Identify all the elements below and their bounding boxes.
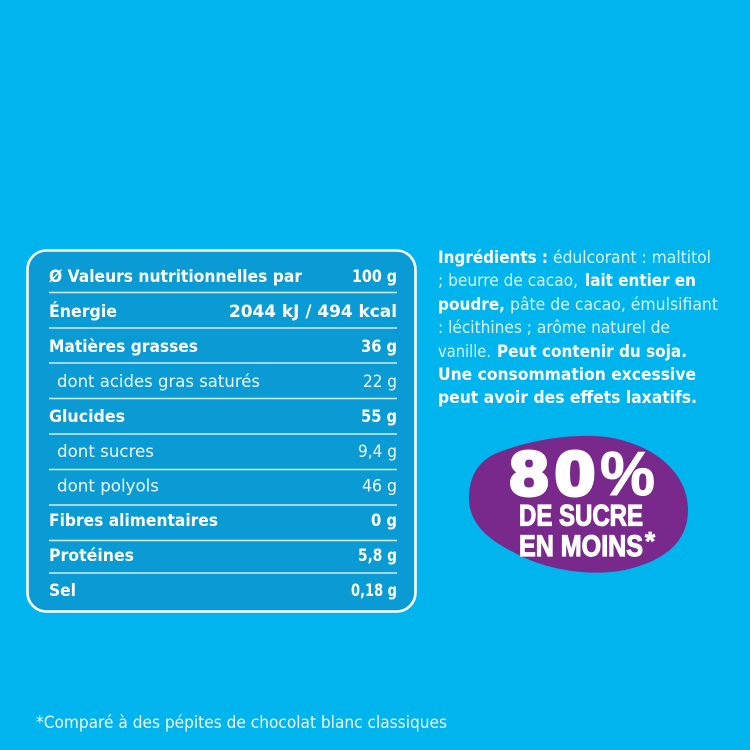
row: sel: Sel bbox=[49, 581, 76, 601]
row: sucres: dont sucres bbox=[57, 442, 154, 462]
row: acides gras saturés bbox=[57, 372, 397, 392]
row: matières grasses bbox=[49, 337, 397, 357]
row: sel: 0,18 g bbox=[351, 581, 397, 601]
text block: ingredients: : lécithines ; arôme naturel de bbox=[438, 318, 670, 338]
text block: ingredients: Peut contenir du soja. bbox=[497, 342, 687, 362]
row: acides gras saturés: dont acides gras saturés bbox=[57, 372, 260, 392]
row: protéines bbox=[49, 546, 397, 566]
footnote: *Comparé à des pépites de chocolat blanc classiques bbox=[36, 713, 447, 733]
badge: 80% de sucre en moins: EN MOINS bbox=[519, 530, 643, 563]
text block: ingredients: vanille. bbox=[438, 342, 491, 362]
text block: ingredients: peut avoir des effets laxatifs. bbox=[438, 388, 697, 408]
badge: 80% de sucre en moins bbox=[469, 436, 688, 573]
row: sucres bbox=[57, 442, 397, 462]
row: fibres alimentaires: 0 g bbox=[371, 511, 397, 531]
table header row: Ø Valeurs nutritionnelles par bbox=[49, 267, 303, 287]
text block: ingredients: édulcorant : maltitol bbox=[553, 248, 711, 268]
text block: ingredients: Une consommation excessive bbox=[438, 365, 696, 385]
text block: ingredients: lait entier en bbox=[585, 271, 696, 291]
text block: ingredients: poudre, bbox=[438, 295, 505, 315]
row: polyols bbox=[57, 476, 397, 496]
badge: 80% de sucre en moins: DE SUCRE bbox=[519, 500, 643, 532]
row: sel bbox=[49, 581, 397, 601]
text block: ingredients: pâte de cacao, émulsifiant bbox=[510, 295, 718, 315]
row: énergie: 2044 kJ / 494 kcal bbox=[229, 302, 397, 322]
badge: 80% de sucre en moins: * bbox=[645, 526, 656, 556]
row: fibres alimentaires: Fibres alimentaires bbox=[49, 511, 218, 531]
row: énergie bbox=[49, 300, 397, 322]
row: fibres alimentaires bbox=[49, 511, 397, 531]
row: glucides bbox=[49, 407, 397, 427]
panel: nutrition table bbox=[28, 250, 416, 612]
row: énergie: Énergie bbox=[49, 300, 117, 322]
text block: ingredients bbox=[438, 248, 718, 408]
row: matières grasses: Matières grasses bbox=[49, 337, 198, 357]
row: glucides: 55 g bbox=[361, 407, 397, 427]
row: sucres: 9,4 g bbox=[358, 442, 397, 462]
badge: 80% de sucre en moins: % bbox=[600, 440, 655, 509]
badge: 80% de sucre en moins: 0 bbox=[555, 440, 595, 509]
text block: ingredients: ; beurre de cacao, bbox=[438, 271, 578, 291]
row: matières grasses: 36 g bbox=[361, 337, 397, 357]
badge: 80% de sucre en moins: 8 bbox=[510, 440, 548, 509]
row: polyols: 46 g bbox=[362, 476, 397, 496]
text block: ingredients: Ingrédients : bbox=[438, 248, 548, 268]
row: acides gras saturés: 22 g bbox=[363, 372, 397, 392]
row: glucides: Glucides bbox=[49, 407, 125, 427]
table header row: 100 g bbox=[352, 267, 397, 287]
row: polyols: dont polyols bbox=[57, 476, 159, 496]
row: protéines: 5,8 g bbox=[358, 546, 397, 566]
row: protéines: Protéines bbox=[49, 546, 134, 566]
